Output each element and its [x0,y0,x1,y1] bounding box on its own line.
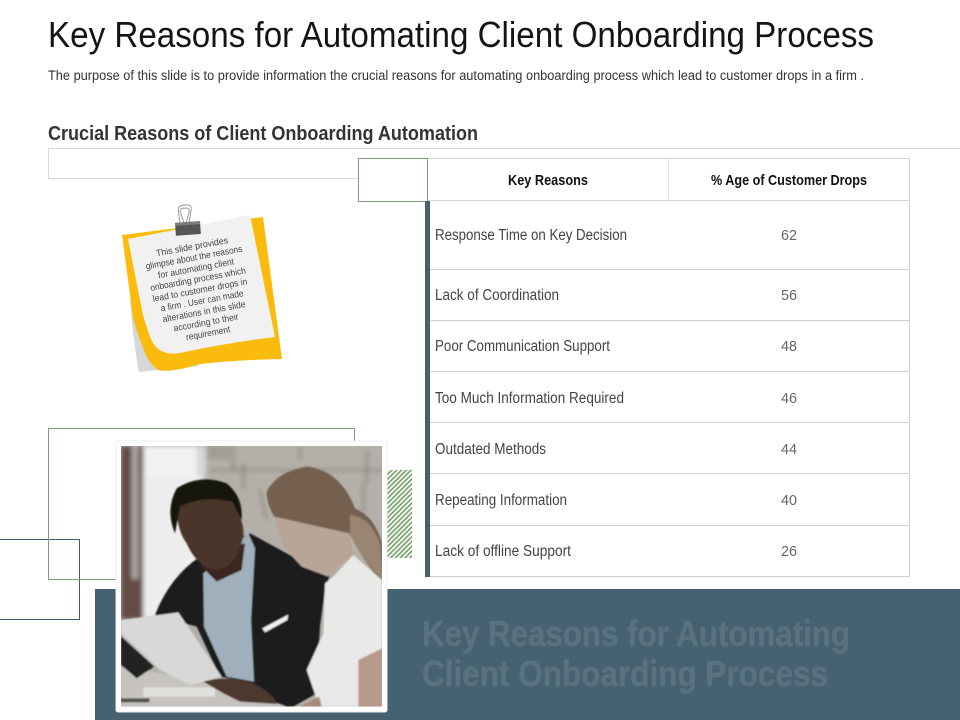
row: repeating information: Repeating Information [435,492,567,509]
row: outdated methods: Outdated Methods [435,441,546,458]
pocket square [262,615,288,632]
heading outline box [48,148,960,178]
green outline frame [48,428,354,580]
row lines and right edge [430,201,910,577]
note text: a firm . User can made [160,288,244,313]
hatched green block [387,470,412,558]
row: communication: 48 [781,339,797,355]
woman's hair [267,467,382,583]
woman's face and neck [274,517,353,577]
row: communication: Poor Communication Support [435,338,611,355]
man's face [177,498,243,570]
yellow note [122,217,282,371]
bottom banner [95,589,960,720]
man's jacket [155,533,330,707]
row: offline support: Lack of offline Support [435,543,572,560]
binder clip [174,204,201,236]
row: offline support: 26 [781,544,797,560]
table header [428,158,910,200]
row: repeating information [435,492,797,509]
hands [203,679,277,704]
row: coordination: Lack of Coordination [435,287,559,304]
note text: according to their [173,312,239,333]
row: response time: 62 [781,228,797,244]
paper [121,612,222,685]
photo of two colleagues [116,441,387,712]
banner text: Client Onboarding Process [422,653,828,694]
dark accent square outline [0,540,80,620]
row: outdated methods: 44 [781,442,797,458]
sticky note [122,204,282,372]
note text: onboarding process which [149,265,247,293]
note text: glimpse about the reasons [145,244,243,271]
row: too much information: 46 [781,391,797,407]
note text: alterations in this slide [162,299,246,324]
man's hair [170,479,242,533]
row: coordination: 56 [781,288,797,304]
table header: % Age of Customer Drops [711,172,867,189]
note text: for automating client [157,256,235,280]
row: outdated methods [435,441,797,458]
table header: Key Reasons [508,172,588,189]
section heading: Crucial Reasons of Client Onboarding Automation [48,123,478,145]
papers on table [143,687,215,697]
row: repeating information: 40 [781,493,797,509]
note text: This slide provides [155,235,229,258]
white sheet [128,215,275,354]
note text: requirement [185,324,231,342]
man's shirt [203,533,255,682]
woman's arm [358,648,382,707]
dark sleeve [121,637,154,678]
note text: lead to customer drops in [152,276,248,304]
empty header cell [358,158,428,202]
woman's ponytail highlight [350,515,382,580]
row: too much information [435,390,797,407]
table surface [121,667,287,707]
banner text [422,613,850,694]
man's neck [200,543,245,582]
row: coordination [435,287,797,304]
table [358,158,910,577]
subtitle: The purpose of this slide is to provide information the crucial reasons for automating onboarding process which lead to customer drops in a firm . [48,68,864,83]
row: offline support [435,543,797,560]
left accent bar [425,201,430,577]
row: too much information: Too Much Information Required [435,390,624,407]
banner text: Key Reasons for Automating [422,613,850,654]
title: Key Reasons for Automating Client Onboarding Process [48,14,874,55]
woman's blouse [307,555,382,707]
row: communication [435,338,797,355]
note shadow [130,300,200,372]
note text [143,233,257,347]
row: response time [435,227,797,244]
row: response time: Response Time on Key Decision [435,227,627,244]
